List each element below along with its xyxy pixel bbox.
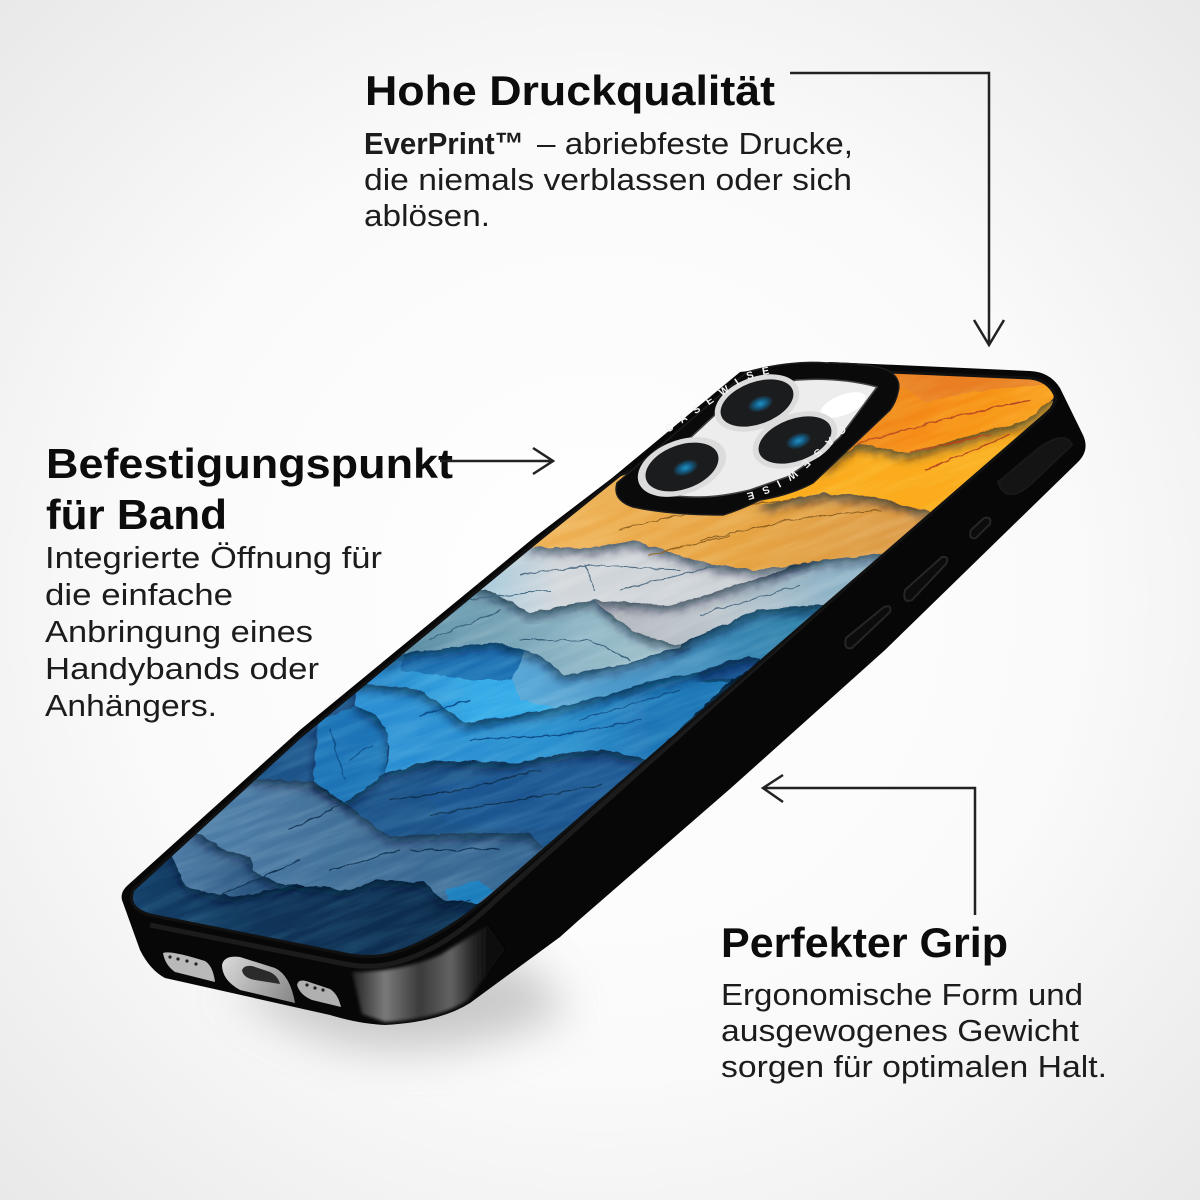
button lower: [845, 606, 890, 648]
paint layer dark blue: [246, 693, 696, 854]
heading: [46, 440, 453, 538]
camera glass: [642, 379, 877, 497]
paint layer steel: [188, 778, 548, 912]
ports: [163, 952, 341, 1007]
cyan shadow band: [400, 642, 524, 680]
usb opening: [242, 966, 280, 984]
callout: Befestigungspunkt: [45, 440, 453, 723]
cracks orange: [858, 400, 1030, 470]
top band: [900, 374, 1044, 403]
body text: Anbringung eines: [45, 614, 313, 649]
body text: Anhängers.: [45, 688, 217, 723]
body text: sorgen für optimalen Halt.: [721, 1049, 1107, 1084]
lens right: [745, 401, 845, 479]
body text: Integrierte Öffnung für: [45, 540, 382, 575]
paint layer grey: [592, 553, 883, 657]
cracks: [210, 400, 1030, 945]
button upper: [904, 557, 947, 601]
paint layer orange: [820, 384, 1054, 480]
paint layer tan: [522, 474, 930, 582]
body text: ausgewogenes Gewicht: [721, 1013, 1079, 1048]
paint layer yellow: [760, 400, 1060, 513]
paint layer cyan: [349, 642, 760, 736]
phone: [122, 362, 1086, 1025]
painted artwork: [132, 374, 1054, 955]
heading: Hohe Druckqualität: [365, 67, 775, 114]
body text: [721, 977, 1107, 1084]
case rim: [150, 398, 1056, 966]
body text: – abriebfeste Drucke,: [537, 126, 853, 161]
cracks tan: [620, 500, 880, 555]
body text: EverPrint™: [364, 126, 524, 161]
callout: Perfekter Grip: [721, 919, 1107, 1084]
arrow: print quality: [790, 73, 1004, 345]
cracks teal: [430, 590, 630, 660]
painted texture: [138, 376, 1053, 954]
phone drop shadow: [230, 960, 570, 1050]
paint layer blue: [350, 665, 754, 782]
ring brand bottom: CASEWISE: [746, 429, 846, 500]
lens top: [707, 364, 807, 442]
camera module: [615, 362, 900, 516]
body text: ablösen.: [364, 198, 490, 233]
callout: Hohe Druckqualität: [364, 67, 853, 233]
cracks blue: [330, 650, 680, 780]
heading: Befestigungspunkt: [46, 440, 453, 487]
small switch: [970, 518, 990, 538]
cracks dark: [210, 770, 600, 945]
arrow: band attachment: [440, 448, 553, 474]
band opening: [998, 438, 1072, 494]
paint layer silver: [472, 540, 817, 625]
arrow: grip: [763, 775, 975, 915]
cracks silver: [520, 565, 800, 615]
speaker right: [297, 980, 341, 1007]
ring brand top: CASEWISE: [666, 366, 770, 432]
usb port: [222, 957, 295, 1003]
corner sheen: [352, 925, 505, 1022]
dark blue tip: [696, 655, 761, 680]
painting base navy: [133, 398, 1054, 955]
paint layer sky: [512, 604, 824, 708]
dark band right: [588, 754, 616, 758]
body text: [364, 126, 853, 233]
side buttons: [845, 438, 1072, 648]
heading: Perfekter Grip: [721, 919, 1008, 966]
paint layer lower lobe: [168, 834, 312, 906]
body text: [45, 540, 382, 723]
camera ring: [616, 362, 899, 515]
phone case body: [122, 362, 1086, 1025]
bright patch: [445, 880, 492, 903]
paint layer bowl: [314, 700, 389, 803]
body text: Ergonomische Form und: [721, 977, 1083, 1012]
speaker holes: [168, 955, 325, 992]
speaker left: [163, 952, 215, 982]
screen edge: [131, 372, 1055, 956]
paint layer teal: [382, 590, 700, 687]
heading: für Band: [46, 491, 227, 538]
body text: die niemals verblassen oder sich: [364, 162, 852, 197]
highlight: [817, 387, 869, 423]
lens left: [630, 426, 734, 508]
body text: die einfache: [45, 577, 233, 612]
body text: Handybands oder: [45, 651, 319, 686]
